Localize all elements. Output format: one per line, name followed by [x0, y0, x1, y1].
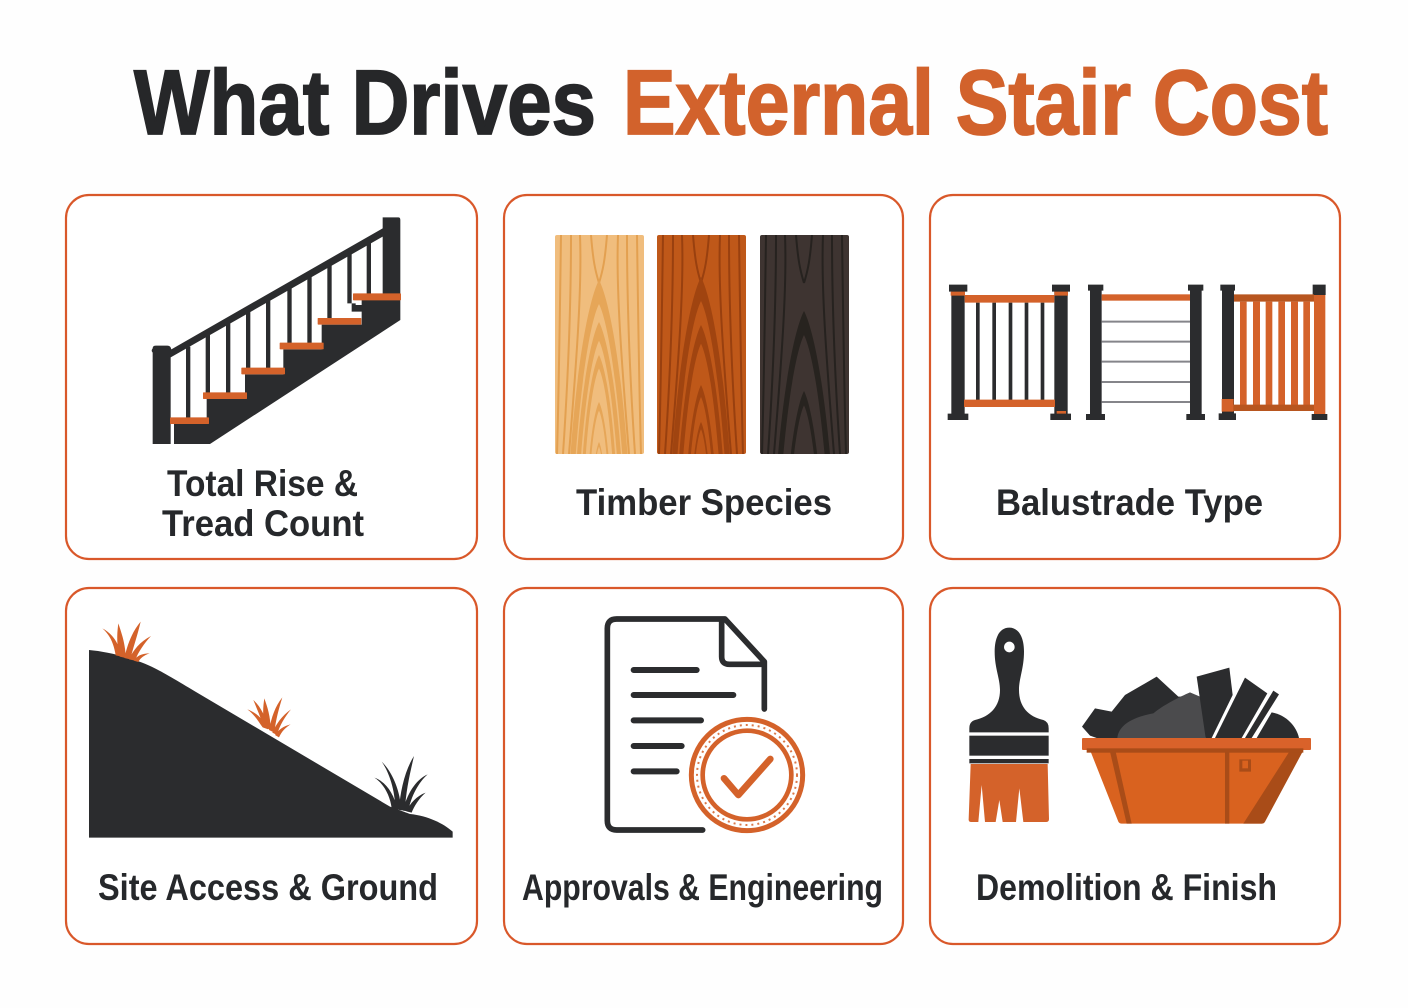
document text lines — [634, 670, 733, 771]
approval stamp — [691, 719, 803, 831]
label: Total Rise & — [167, 463, 358, 504]
label: Demolition & Finish — [976, 867, 1277, 908]
title: What Drives — [134, 52, 596, 154]
panel: approvals and engineering — [504, 588, 903, 944]
icon: balustrade with steel wires — [1086, 285, 1205, 420]
rubble — [1082, 677, 1206, 738]
icon: red timber plank — [657, 235, 746, 454]
icon: sloped ground with grass — [89, 622, 453, 838]
document outline — [607, 619, 764, 830]
icon: paint brush — [969, 628, 1049, 822]
icon: light timber plank — [555, 235, 644, 454]
icon: document with approval stamp — [607, 619, 803, 831]
panel: site access and ground — [66, 588, 477, 944]
panel: total rise and tread count — [66, 195, 477, 559]
label: Timber Species — [576, 482, 832, 523]
title — [134, 52, 1328, 154]
icon: dark timber plank — [760, 235, 849, 454]
label: Approvals & Engineering — [522, 867, 883, 908]
icon: balustrade with black balusters — [948, 285, 1071, 420]
label — [162, 463, 364, 544]
icon: rubble skip — [1082, 668, 1311, 824]
icon: staircase — [152, 217, 401, 444]
skip body — [1090, 750, 1303, 824]
label: Site Access & Ground — [98, 867, 438, 908]
icon: balustrade with timber pickets — [1219, 285, 1327, 420]
panel: demolition and finish — [930, 588, 1340, 944]
label: Tread Count — [162, 503, 364, 544]
panel: timber species — [504, 195, 903, 559]
label: Balustrade Type — [996, 482, 1263, 523]
panel: balustrade type — [930, 195, 1340, 559]
